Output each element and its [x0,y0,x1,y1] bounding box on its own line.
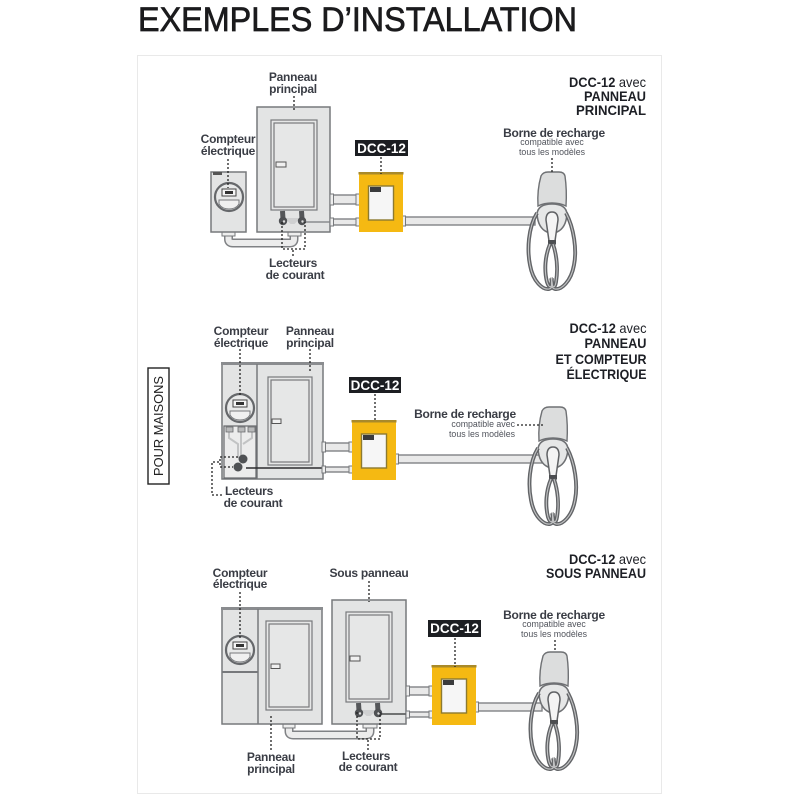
current sensors [355,703,382,717]
wire to conduit [380,713,407,715]
label: borne: tous les modèles [521,629,588,639]
label: lecteurs: Lecteurs [342,749,391,763]
label: compteur: électrique [214,336,269,350]
tag: DCC-12: DCC-12 [430,621,479,636]
upper conduit to DCC [330,194,360,205]
heading: diagram 3: DCC-12 avec [569,551,646,567]
heading: diagram 1 [569,74,646,118]
main panel [257,107,330,232]
tag: DCC-12: DCC-12 [357,141,406,156]
label: sous panneau: Sous panneau [329,566,409,580]
title: EXEMPLES D’INSTALLATION [138,1,577,39]
conduit between meter and panel [228,233,294,243]
diagram 3: DCC-12 with sub panel [213,551,646,776]
conduit highlight [228,233,294,243]
label: borne [414,407,516,439]
label: compteur: Compteur [214,324,269,338]
label: borne: Borne de recharge [414,407,516,421]
label: compteur: Compteur [201,132,256,146]
heading: diagram 2: ET COMPTEUR [556,351,646,367]
label: lecteurs: de courant [266,268,325,282]
heading: diagram 1: DCC-12 avec [569,74,646,90]
label: borne: Borne de recharge [503,608,605,622]
DCC-12 unit [358,172,404,232]
label: borne: tous les modèles [449,429,516,439]
heading: diagram 2: PANNEAU [584,335,646,351]
conduit between panels [289,725,370,735]
wire to conduit [306,221,331,223]
upper conduit [322,442,352,452]
combined meter and main panel [221,607,323,724]
label: compteur: électrique [213,577,268,591]
heading: diagram 2: DCC-12 avec [570,320,646,336]
heading: diagram 3 [546,551,646,581]
lower conduit [322,466,352,473]
label: panneau: Panneau [286,324,334,338]
heading: diagram 1: PANNEAU [584,88,646,104]
charging station [530,652,577,769]
tag: DCC-12: DCC-12 [351,378,399,393]
diagram 1: DCC-12 with main panel [201,70,646,289]
leader lines [212,349,543,495]
label: lecteurs: de courant [224,496,283,510]
leader lines [240,581,555,750]
lower conduit [406,711,432,718]
heading: diagram 2 [556,320,646,382]
charging station [529,407,576,524]
heading: diagram 2: ÉLECTRIQUE [566,366,646,382]
label: borne [503,608,605,639]
label: panneau principal: principal [269,82,317,96]
label: compteur: Compteur [213,566,268,580]
charging station [528,172,575,289]
lower conduit to DCC [330,218,360,226]
conduit to charger [395,454,542,464]
DCC-12 unit [352,420,396,480]
label: lecteurs: de courant [339,760,398,774]
label: compteur: électrique [201,144,256,158]
conduit fittings [283,724,377,728]
label: borne: compatible avec [520,137,584,147]
label: panneau principal: Panneau [269,70,317,84]
panel: background frame [138,56,662,794]
label: borne [503,126,605,157]
side label: pour maisons: POUR MAISONS [152,376,166,476]
label: lecteurs: Lecteurs [225,484,274,498]
label: panneau principal: Panneau [247,750,295,764]
combined meter and panel [221,362,324,479]
DCC-12 unit [432,665,476,725]
label: lecteurs: Lecteurs [269,256,318,270]
sub panel [332,600,406,724]
label: panneau principal: principal [247,762,295,776]
label: borne: tous les modèles [519,147,586,157]
side label: pour maisons [148,368,169,484]
conduit to charger [402,216,535,226]
conduit highlight [289,725,370,735]
conduit to charger [475,702,542,712]
label: borne: compatible avec [451,419,516,429]
diagram 2: DCC-12 with panel and meter [212,320,646,524]
label: borne: Borne de recharge [503,126,605,140]
leader lines [228,96,552,258]
current sensors [279,211,306,225]
electric meter box [211,172,246,232]
upper conduit [406,686,432,696]
heading: diagram 1: PRINCIPAL [576,102,646,118]
label: panneau: principal [286,336,334,350]
conduit fittings [222,232,301,236]
heading: diagram 3: SOUS PANNEAU [546,565,646,581]
label: borne: compatible avec [522,619,586,629]
